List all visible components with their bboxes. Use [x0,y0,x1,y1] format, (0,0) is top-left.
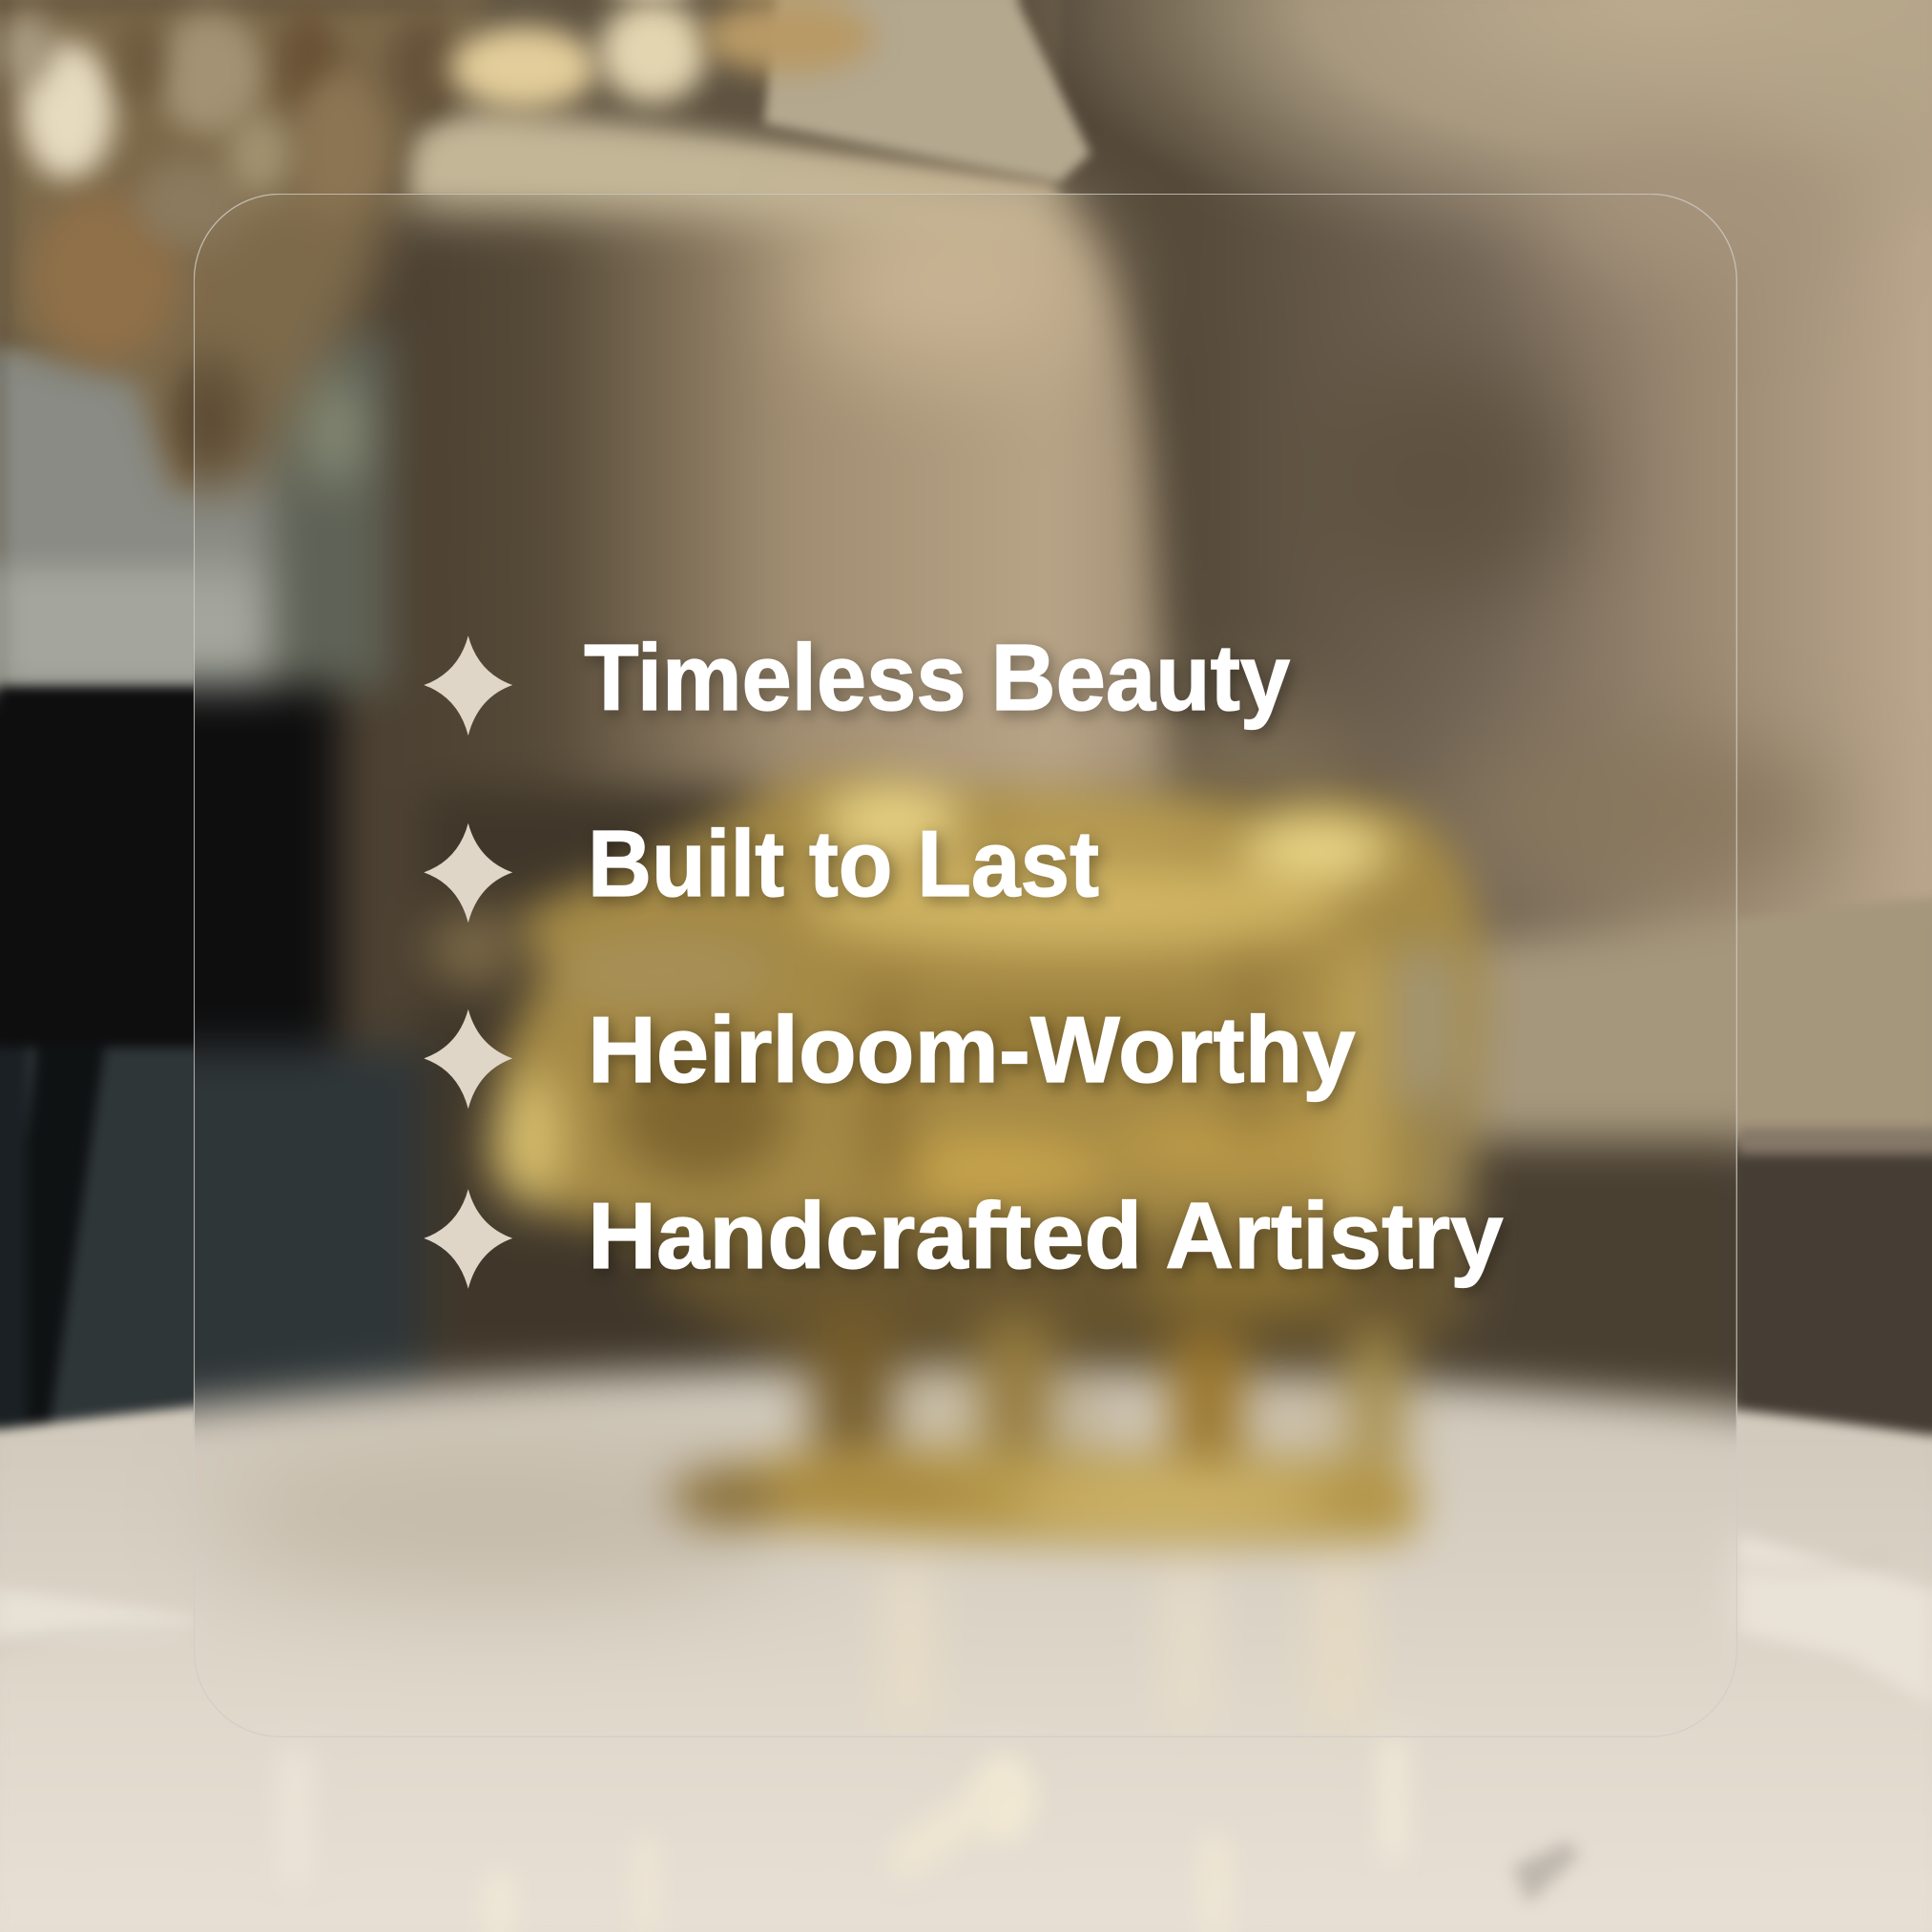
icon: four-point star [424,635,512,736]
icon: four-point star [424,1189,512,1289]
item: Timeless Beauty [424,625,1291,736]
text: Timeless Beauty: Timeless Beauty [584,625,1291,730]
item: Heirloom-Worthy [424,997,1356,1109]
feature list [424,625,1504,1289]
text: Heirloom-Worthy: Heirloom-Worthy [588,997,1356,1102]
frosted glass panel [193,193,1737,1737]
text: Built to Last: Built to Last [588,811,1099,916]
item: Handcrafted Artistry [424,1183,1504,1289]
icon: four-point star [424,823,512,923]
text: Handcrafted Artistry: Handcrafted Artistry [588,1183,1504,1288]
icon: four-point star [424,1009,512,1109]
item: Built to Last [424,811,1099,923]
